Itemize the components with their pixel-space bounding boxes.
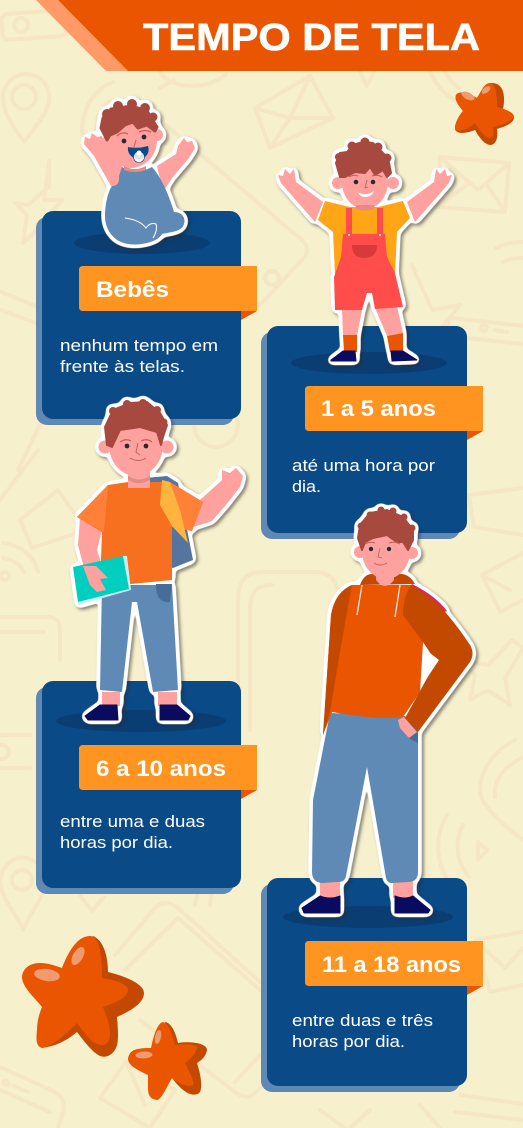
body text [292,456,435,496]
illustration: baby [84,99,195,245]
card shadow [261,884,460,1092]
card shadow [36,687,234,894]
panel: 1 a 5 anos [261,326,483,539]
body text: entre uma e duas [60,812,205,831]
label tag fold [467,431,483,440]
star: top right [455,83,514,145]
label tag [79,745,257,790]
label text: Bebês [96,277,169,302]
floor shadow [291,352,447,374]
label tag [305,941,483,986]
body text: entre duas e três [292,1011,433,1030]
label text: 6 a 10 anos [96,756,226,781]
body text: horas por dia. [60,833,173,852]
body text [60,812,205,852]
body text: nenhum tempo em [60,336,218,355]
label tag fold [241,311,257,320]
panel: 6 a 10 anos [36,681,257,894]
banner main [58,0,523,71]
body text [292,1011,433,1051]
star: bottom small [128,1022,207,1100]
body text [60,336,218,376]
card body [267,326,467,533]
label tag fold [467,986,483,995]
label text: 11 a 18 anos [322,952,461,977]
panel: 11 a 18 anos [261,878,483,1092]
body text: até uma hora por [292,456,435,475]
body text: horas por dia. [292,1032,405,1051]
illustration: toddler in overalls [278,138,452,361]
card body [42,211,241,419]
label tag [79,266,257,311]
body text: dia. [292,477,321,496]
illustration: teenager in hoodie [302,506,473,913]
header banner [36,0,523,71]
label tag [305,386,483,431]
floor shadow [283,906,453,928]
illustration: child with backpack and book [73,399,243,720]
label text: 1 a 5 anos [321,396,436,421]
card shadow [36,217,234,425]
panel: Bebês [36,211,257,425]
floor shadow [56,710,226,732]
star: bottom left large [22,936,144,1057]
body text: frente às telas. [60,357,185,376]
title: TEMPO DE TELA [143,17,480,59]
card shadow [261,332,460,539]
floor shadow [74,232,210,254]
label tag fold [241,790,257,799]
card body [267,878,467,1086]
card body [42,681,241,888]
banner light stripe [36,0,128,71]
